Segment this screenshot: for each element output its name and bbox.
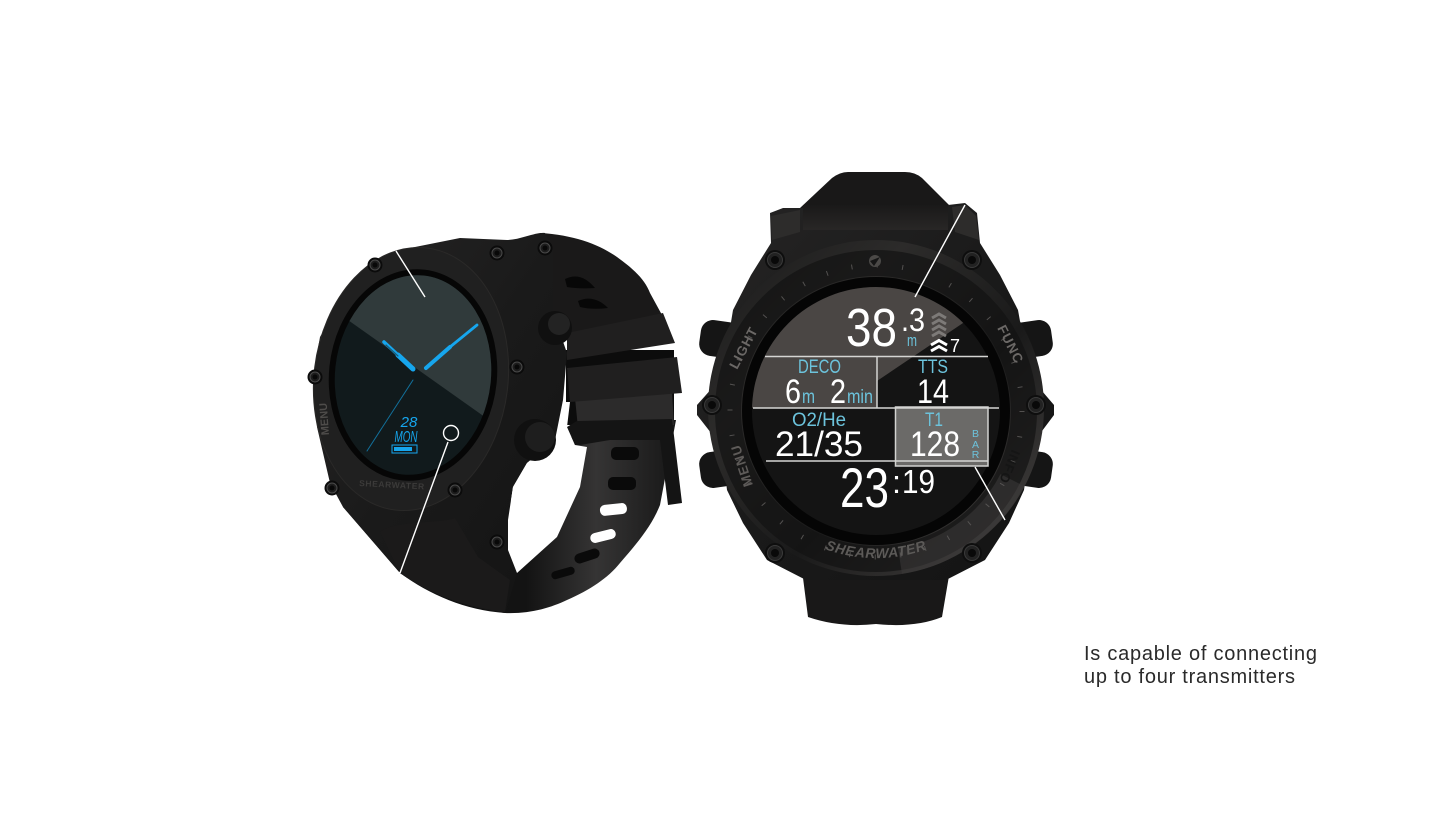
leader lines: right watch bbox=[915, 205, 1005, 520]
bezel bright arc bbox=[900, 480, 1012, 561]
date text: MON bbox=[394, 429, 418, 446]
gas mix cell: 21/35 bbox=[775, 425, 863, 464]
strap section under keepers bbox=[575, 392, 674, 428]
case screws bbox=[308, 240, 552, 550]
bezel labels: LIGHT bbox=[726, 324, 761, 371]
case screws bbox=[702, 250, 1046, 563]
TTS cell: 14 bbox=[917, 373, 949, 411]
right watch bbox=[697, 172, 1054, 626]
black dial ring bbox=[742, 277, 1010, 545]
leader lines and marker: left watch bbox=[396, 251, 458, 573]
caption bbox=[1084, 643, 1318, 688]
T1 cell: T1 bbox=[925, 410, 943, 431]
watch case bbox=[697, 203, 1054, 580]
bezel bbox=[299, 236, 523, 522]
DECO cell: DECO bbox=[798, 357, 841, 378]
bezel labels: INFO bbox=[996, 448, 1023, 486]
watch case bbox=[313, 233, 567, 613]
depth readout: .3 bbox=[901, 302, 925, 338]
T1 cell: 128 bbox=[910, 425, 960, 464]
grid lines bbox=[753, 356, 999, 461]
T1 cell: B bbox=[972, 428, 979, 440]
bezel labels bbox=[726, 323, 1027, 558]
bezel labels: MENU bbox=[728, 442, 756, 489]
white opening under the case bbox=[508, 402, 587, 573]
logo mark bbox=[869, 255, 881, 267]
top strap bbox=[800, 172, 952, 245]
bezel ticks bbox=[730, 265, 1022, 557]
gas mix cell: O2/He bbox=[792, 410, 846, 431]
ascent chevrons bbox=[931, 314, 947, 351]
depth readout: 7 bbox=[950, 336, 960, 356]
screen bbox=[752, 287, 1000, 535]
dial ring bbox=[318, 261, 508, 489]
depth readout: 38 bbox=[846, 298, 897, 358]
DECO cell: m bbox=[802, 387, 815, 408]
date text: 28 bbox=[400, 414, 418, 431]
top strap centre band bbox=[803, 205, 948, 240]
crown buttons bbox=[514, 311, 572, 461]
DECO cell bbox=[785, 357, 873, 411]
buckle bbox=[567, 419, 682, 505]
shadow between keepers bbox=[566, 350, 674, 425]
time readout: : bbox=[892, 464, 901, 500]
left watch bbox=[299, 233, 682, 613]
T1 cell: R bbox=[972, 449, 980, 461]
lower band bbox=[343, 420, 676, 613]
bezel labels: SHEARWATER bbox=[826, 541, 926, 558]
DECO cell: 2 bbox=[830, 373, 846, 411]
time readout: 23 bbox=[840, 456, 889, 519]
time readout: 19 bbox=[902, 463, 935, 500]
TTS cell: TTS bbox=[918, 357, 948, 378]
caption: up to four transmitters bbox=[1084, 666, 1296, 688]
time readout bbox=[840, 456, 935, 519]
T1 cell bbox=[910, 410, 980, 464]
depth readout bbox=[846, 298, 960, 358]
bezel label MENU: MENU bbox=[318, 402, 332, 436]
caption: Is capable of connecting bbox=[1084, 643, 1318, 665]
bezel inner track bbox=[728, 263, 1024, 559]
watch hands bbox=[367, 325, 477, 451]
DECO cell: min bbox=[847, 387, 873, 408]
TTS cell bbox=[917, 357, 949, 411]
lower strap holes bbox=[550, 447, 639, 580]
keeper loops bbox=[567, 313, 682, 402]
strap holes: upper band bbox=[565, 276, 608, 309]
bezel label SHEARWATER: SHEARWATER bbox=[359, 478, 425, 491]
lug highlights bbox=[771, 205, 979, 240]
bottom strap bbox=[802, 570, 950, 625]
depth readout: m bbox=[907, 331, 917, 350]
T1 cell: A bbox=[972, 439, 979, 451]
dial face bbox=[334, 275, 492, 475]
bezel bbox=[708, 240, 1044, 576]
T1 highlight box bbox=[896, 407, 988, 466]
DECO cell: 6 bbox=[785, 373, 801, 411]
date text bbox=[392, 414, 418, 453]
lower strap stub under case bbox=[380, 518, 510, 612]
side buttons bbox=[698, 319, 1054, 489]
bezel labels: FUNC bbox=[994, 323, 1027, 366]
strap: left watch back band bbox=[540, 233, 662, 340]
